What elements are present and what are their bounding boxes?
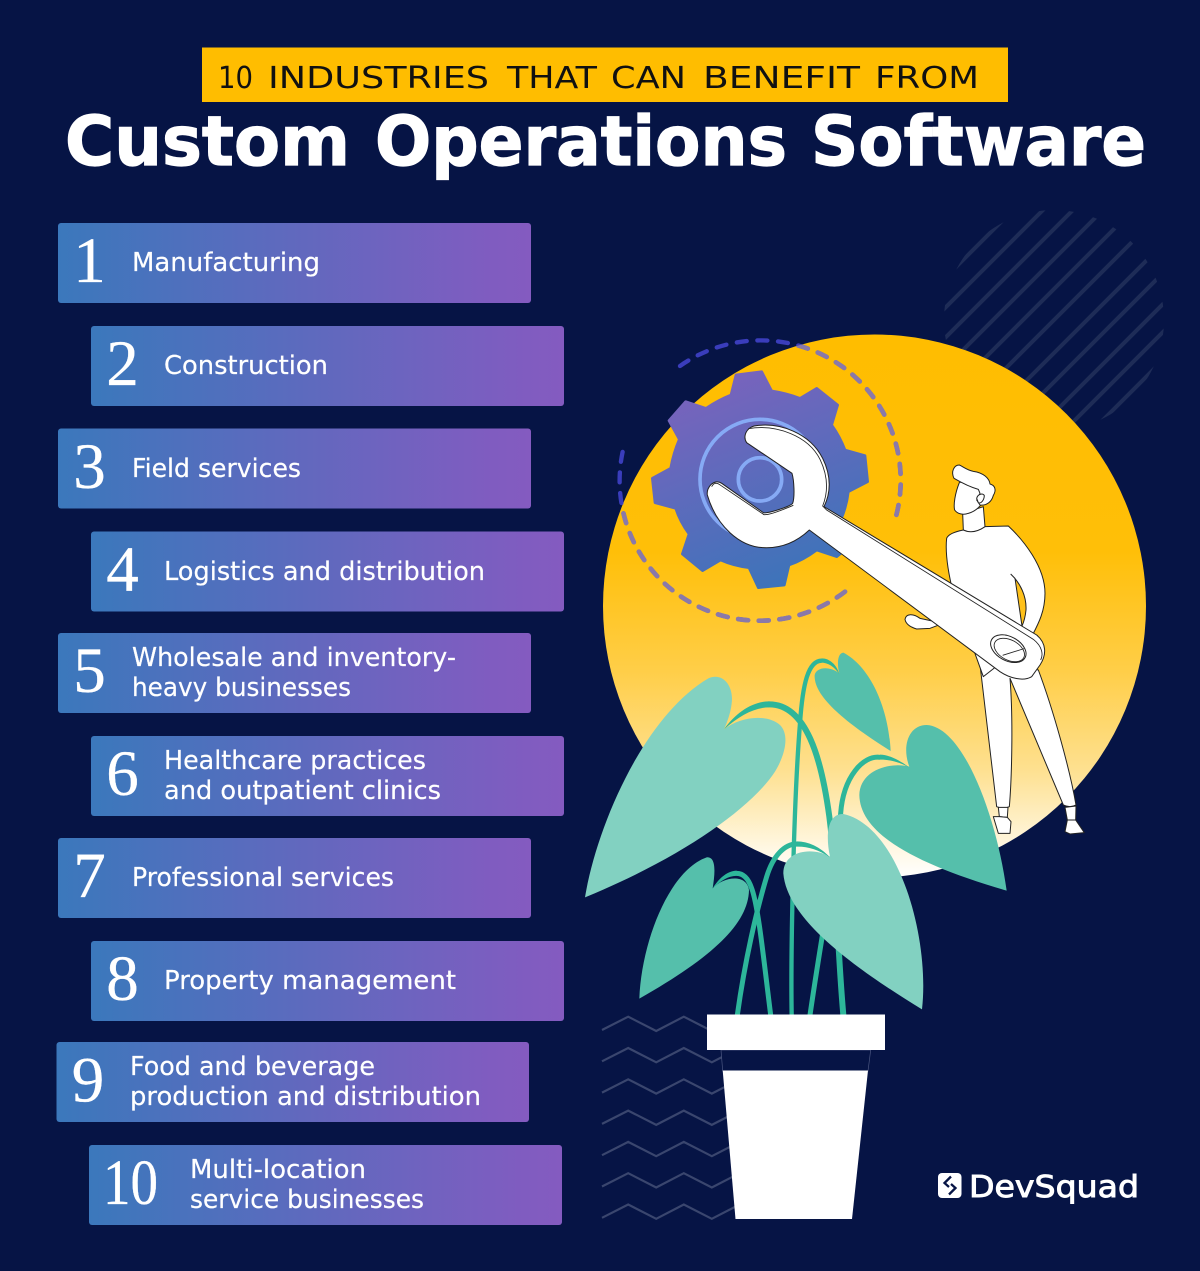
row 1: Manufacturing: 1 [73, 225, 106, 297]
subtitle banner: FROM [875, 61, 979, 96]
icon: gear [652, 372, 868, 588]
row 5: Wholesale and inventory-heavy businesses [58, 633, 531, 713]
row 9: Food and beverage production and distribution: 9 [72, 1044, 104, 1116]
leaf: right [859, 725, 1007, 891]
row 4: Logistics and distribution: 4 [106, 534, 139, 606]
row 6: Healthcare practices and outpatient clinics [91, 736, 564, 816]
row 8: Property management [91, 941, 564, 1021]
subtitle banner [202, 48, 1008, 102]
leaf: small top [815, 653, 891, 751]
row 10: Multi-location service businesses: service businesses [190, 1185, 424, 1215]
man legs [979, 653, 1084, 834]
main title: Custom [65, 102, 350, 182]
subtitle banner: THAT [506, 61, 597, 96]
main title: Operations [375, 102, 787, 182]
subtitle banner: INDUSTRIES [268, 61, 489, 96]
subtitle banner: 10 [218, 61, 253, 96]
leaf: centre front [783, 814, 923, 1009]
row 6: Healthcare practices and outpatient clinics: Healthcare practices [164, 746, 426, 776]
stem tip: centre leaf [795, 841, 830, 857]
sun circle [603, 334, 1146, 878]
row 6: Healthcare practices and outpatient clinics: and outpatient clinics [164, 776, 441, 806]
row 8: Property management: Property management [164, 966, 456, 996]
row 5: Wholesale and inventory-heavy businesses: 5 [73, 635, 106, 707]
row 3: Field services: Field services [132, 454, 301, 484]
plant [585, 653, 1007, 1015]
row 2: Construction [91, 326, 564, 406]
subtitle banner: BENEFIT [703, 61, 860, 96]
title block [65, 48, 1146, 182]
row 7: Professional services: Professional services [132, 863, 394, 893]
subtitle banner: CAN [611, 61, 686, 96]
row 7: Professional services [58, 838, 531, 918]
zigzag pattern decoration [602, 1017, 740, 1219]
striped circle decoration [944, 210, 1164, 423]
row 10: Multi-location service businesses [89, 1145, 562, 1225]
row 6: Healthcare practices and outpatient clinics: 6 [106, 738, 139, 810]
row 10: Multi-location service businesses: 10 [103, 1147, 158, 1219]
illustration: gear, man and wrench [585, 372, 1139, 1219]
row 9: Food and beverage production and distribution: production and distribution [130, 1082, 481, 1112]
man torso, head and hand [905, 465, 1045, 677]
row 5: Wholesale and inventory-heavy businesses: heavy businesses [132, 673, 351, 703]
row 9: Food and beverage production and distribution: Food and beverage [130, 1052, 375, 1082]
row 7: Professional services: 7 [73, 840, 106, 912]
row 4: Logistics and distribution [91, 532, 564, 612]
row 3: Field services [58, 428, 531, 508]
DevSquad logo: DevSquad [969, 1170, 1139, 1205]
dashed orbit around gear [620, 340, 901, 621]
row 2: Construction: Construction [164, 351, 328, 381]
row 1: Manufacturing [58, 223, 531, 303]
main title: Software [811, 102, 1146, 182]
list of industries [56, 223, 564, 1225]
leaf: large left [585, 677, 785, 897]
icon: logo mark [938, 1173, 962, 1198]
icon: wrench [707, 425, 1045, 679]
man figure [707, 425, 1084, 834]
row 8: Property management: 8 [106, 943, 139, 1015]
row 9: Food and beverage production and distribution [56, 1042, 529, 1122]
row 2: Construction: 2 [106, 328, 139, 400]
stems [713, 658, 909, 1015]
leaf: bottom left [639, 857, 749, 999]
plant pot [707, 1014, 885, 1219]
row 4: Logistics and distribution: Logistics and distribution [164, 557, 485, 587]
main title [65, 102, 1146, 182]
row 10: Multi-location service businesses: Multi-location [190, 1155, 366, 1185]
row 3: Field services: 3 [73, 431, 106, 503]
row 1: Manufacturing: Manufacturing [132, 248, 320, 278]
row 5: Wholesale and inventory-heavy businesses: Wholesale and inventory- [132, 643, 456, 673]
